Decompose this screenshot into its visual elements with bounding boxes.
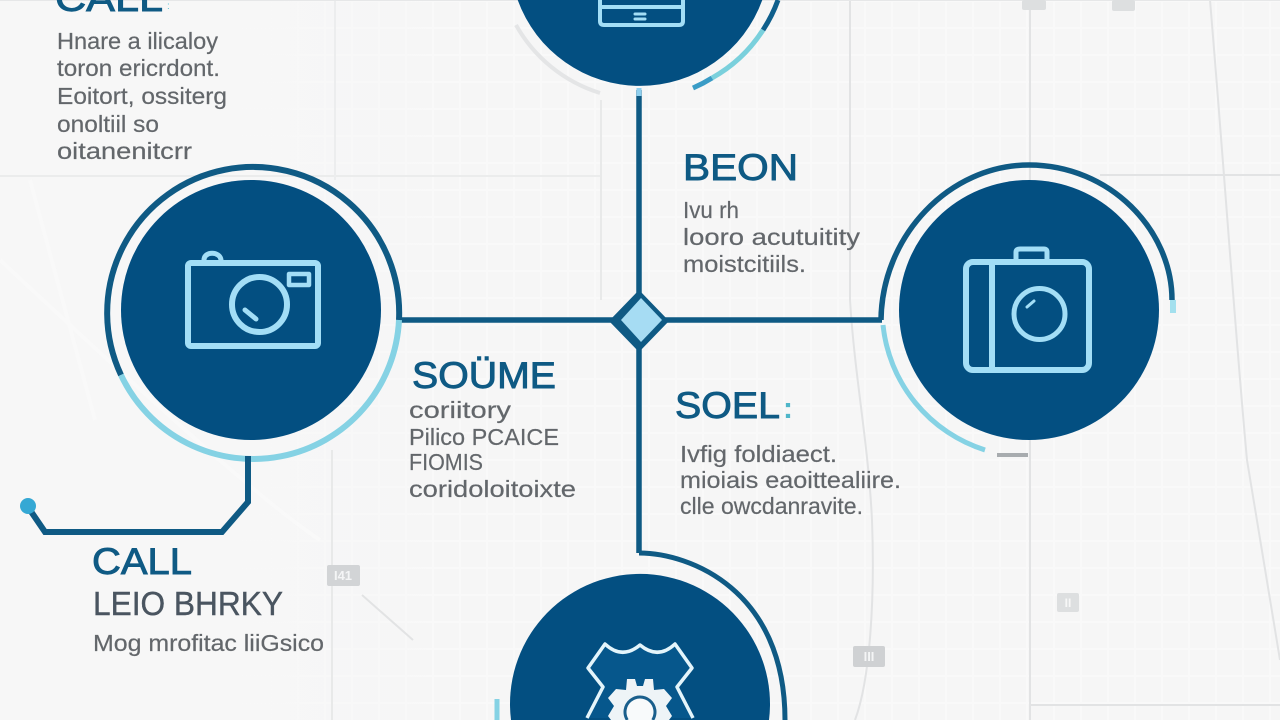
- text block: soel: SOEL: [675, 385, 780, 426]
- map road marker 5: [1112, 0, 1135, 11]
- text block: bottom-left call: Mog mrofitac liiGsico: [93, 630, 324, 656]
- text block: bottom-left call: LEIO BHRKY: [93, 585, 283, 622]
- icon: camera left: [188, 253, 318, 346]
- text block: soel: [675, 385, 901, 519]
- icon: top device: [600, 0, 683, 25]
- icon: camera right: [966, 249, 1089, 370]
- connector lines: [400, 90, 882, 553]
- icon: police badge with gear: [587, 644, 693, 720]
- text block: beon: looro acutuitity: [683, 224, 861, 250]
- node: right circle: [881, 165, 1173, 455]
- connector: left circle to call label: [20, 456, 248, 532]
- text block: top-left call: Hnare a ilicaloy: [57, 28, 218, 54]
- map road marker 2: III: [864, 649, 874, 664]
- text block: beon: moistcitiils.: [683, 251, 806, 277]
- text block: bottom-left call: [92, 541, 324, 656]
- node: bottom circle: [497, 553, 785, 720]
- text block: beon: Ivu rh: [683, 197, 739, 223]
- text block: soume: Pilico PCAICE: [409, 424, 559, 450]
- text block: soel: clle owcdanravite.: [680, 493, 863, 519]
- text block: soume: SOÜME: [412, 355, 556, 396]
- node: left circle: [107, 167, 399, 459]
- text block: soel: mioiais eaoittealiire.: [680, 467, 901, 493]
- text block: top-left call: [55, 0, 227, 164]
- text block: top-left call: Eoitort, ossiterg: [57, 83, 227, 109]
- text block: top-left call: oitanenitcrr: [57, 138, 192, 164]
- text block: bottom-left call: CALL: [92, 541, 192, 582]
- text block: soel: Ivfig foldiaect.: [680, 441, 837, 467]
- top circle stem: [636, 88, 642, 96]
- text block: top-left call: toron ericrdont.: [57, 55, 220, 81]
- map road marker 3: [1057, 593, 1079, 612]
- text block: top-left call: :: [167, 1, 170, 12]
- text block: beon: BEON: [683, 147, 798, 188]
- map road marker 3: II: [1065, 596, 1071, 610]
- node: top circle: [516, 0, 778, 93]
- text block: soume: [409, 355, 576, 502]
- central diamond node: [609, 290, 669, 352]
- map road marker 4: [1022, 0, 1046, 10]
- text block: soel: :: [783, 392, 793, 425]
- map road marker 1: [327, 565, 360, 586]
- text block: beon: [683, 147, 861, 277]
- text block: soume: coridoloitoixte: [409, 476, 576, 502]
- text block: soume: coriitory: [409, 397, 512, 423]
- map road marker 2: [853, 646, 885, 667]
- text block: top-left call: onoltiil so: [57, 111, 159, 137]
- text block: soume: FIOMIS: [409, 449, 483, 475]
- map road marker 1: I41: [334, 568, 352, 583]
